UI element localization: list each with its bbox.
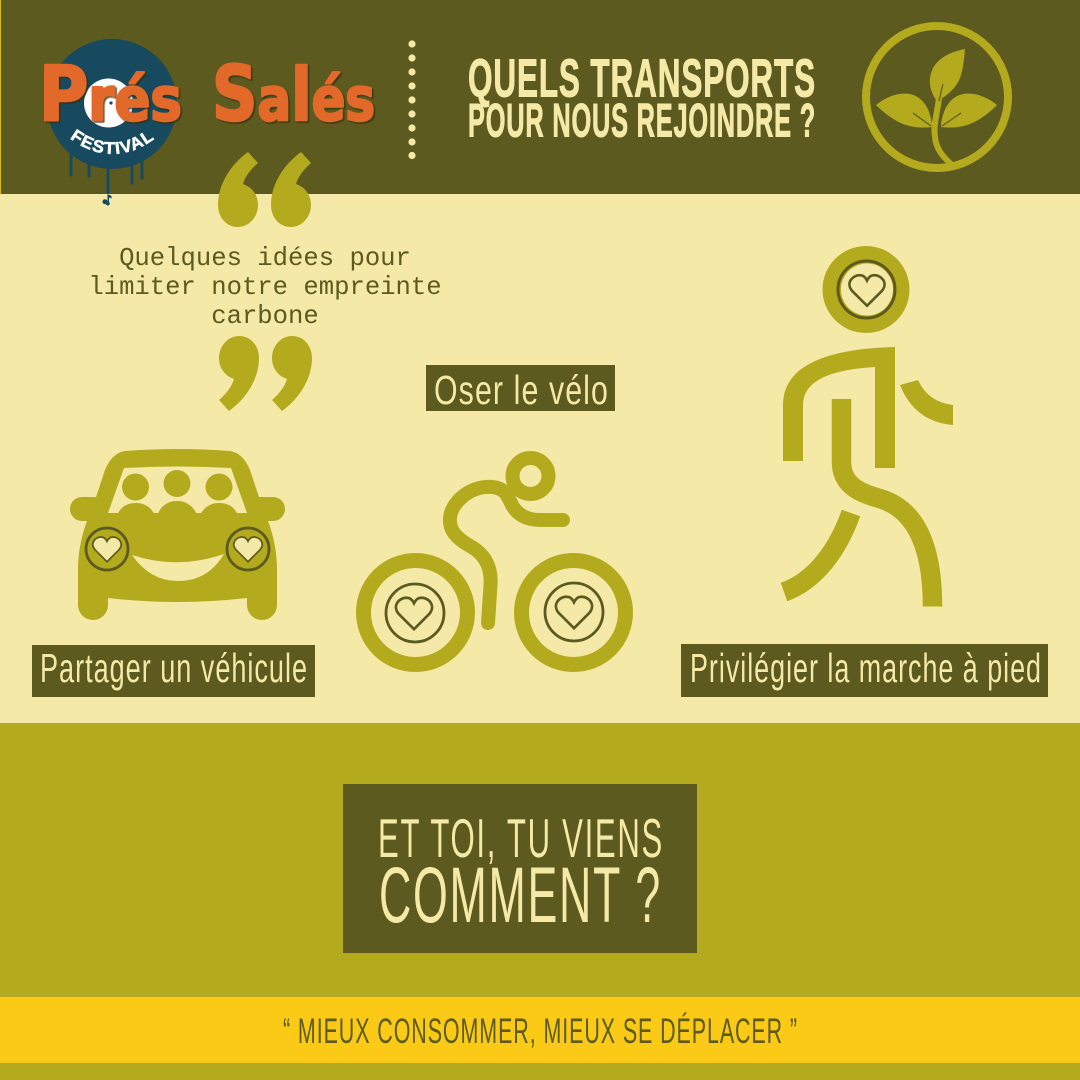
cream background: [0, 194, 1080, 723]
lower olive panel: [0, 723, 1080, 1080]
icon: smiling car with passengers: [70, 449, 285, 620]
right wheel: [522, 560, 626, 664]
walker front arm: [900, 380, 953, 425]
rider head: [512, 458, 548, 494]
passengers: [116, 470, 239, 525]
plant leaf veins: [913, 84, 961, 126]
title: QUELS TRANSPORTS: [468, 48, 816, 108]
walker torso and back arm: [783, 347, 895, 468]
plant right leaf: [941, 93, 997, 128]
smile: [132, 554, 224, 581]
logo drips: [71, 155, 142, 192]
quote block: [88, 152, 442, 411]
quote text: Quelques idées pour: [119, 244, 411, 273]
call to action box: ET TOI, TU VIENS: [378, 807, 664, 869]
label: Partager un véhicule: Partager un véhicule: [40, 645, 308, 691]
left wheel: [364, 560, 468, 664]
quote text: limiter notre empreinte: [88, 273, 442, 302]
walker front leg: [842, 399, 932, 606]
logo music note: [103, 194, 112, 206]
dotted separator: [408, 40, 416, 159]
right headlight heart: [227, 528, 269, 570]
logo word Salés: Salés: [212, 49, 375, 138]
header band: [0, 0, 1080, 194]
logo word Prés: Prés: [39, 49, 182, 138]
call to action box: [343, 784, 697, 953]
windscreen: [108, 466, 247, 513]
logo vinyl disc: [47, 39, 177, 169]
rider body: [450, 487, 563, 623]
call to action box: COMMENT ?: [379, 850, 662, 939]
walker back leg: [784, 513, 851, 592]
opening quote mark: [218, 152, 311, 227]
logo: Prés Salés festival: [39, 39, 376, 206]
plant left leaf: [876, 93, 932, 128]
icon: cyclist: [364, 458, 626, 664]
closing quote mark: [219, 336, 312, 411]
plant stem: [934, 98, 953, 166]
icon: walking person: [783, 246, 953, 606]
label: Partager un véhicule: [32, 645, 315, 697]
plant top leaf: [930, 49, 965, 101]
quote text: [88, 244, 442, 331]
icon: plant in circle: [866, 26, 1008, 168]
logo festival text: FESTIVAL: [70, 128, 154, 154]
quote text: carbone: [211, 302, 319, 331]
left headlight heart: [86, 528, 128, 570]
title: [468, 48, 816, 146]
walker head: [822, 246, 910, 333]
label: Oser le vélo: Oser le vélo: [434, 367, 609, 413]
slogan band: [0, 997, 1080, 1063]
